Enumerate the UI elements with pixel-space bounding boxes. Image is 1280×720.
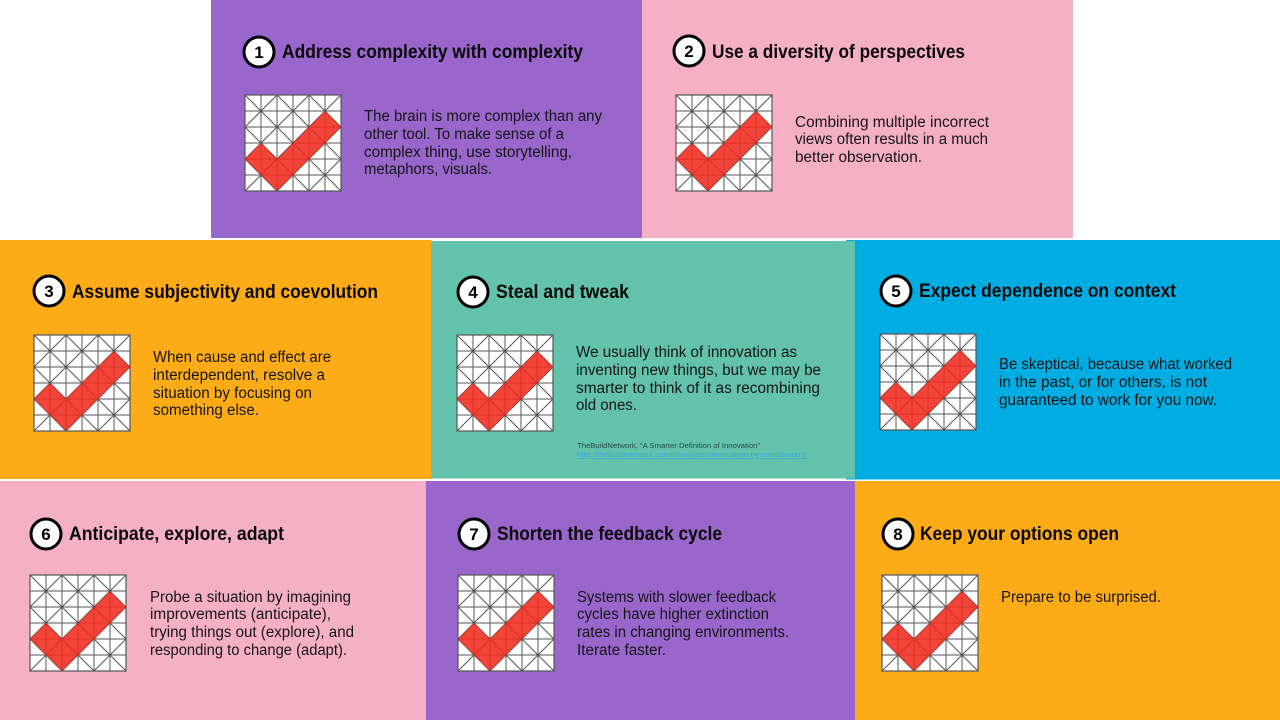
icon: checkmark grid 1 <box>245 95 341 191</box>
panel 4: steal and tweak <box>431 241 855 478</box>
body text 1: other tool. To make sense of a <box>364 126 564 143</box>
number badge 3: 3 <box>44 282 54 301</box>
body text 3 <box>153 349 331 419</box>
number badge 2 <box>674 36 704 66</box>
body text 4: inventing new things, but we may be <box>576 362 821 379</box>
number badge 1: 1 <box>254 43 264 62</box>
heading 3: Assume subjectivity and coevolution <box>72 282 378 303</box>
number badge 2: 2 <box>684 42 694 61</box>
heading 2: Use a diversity of perspectives <box>712 42 965 63</box>
body text 7: Systems with slower feedback <box>577 589 776 606</box>
number badge 4 <box>458 277 488 307</box>
body text 3: interdependent, resolve a <box>153 367 325 384</box>
body text 6: Probe a situation by imagining <box>150 589 351 606</box>
body text 4: We usually think of innovation as <box>576 344 797 361</box>
body text 8: Prepare to be surprised. <box>1001 589 1161 606</box>
number badge 8 <box>883 519 913 549</box>
body text 2: better observation. <box>795 149 922 166</box>
body text 5: guaranteed to work for you now. <box>999 392 1217 409</box>
number badge 1 <box>244 37 274 67</box>
number badge 7 <box>459 519 489 549</box>
body text 7: cycles have higher extinction <box>577 606 769 623</box>
icon: checkmark grid 3 <box>34 335 130 431</box>
icon: checkmark grid 6 <box>30 575 126 671</box>
body text 1: metaphors, visuals. <box>364 161 492 178</box>
panel 5: dependence on context <box>846 240 1280 480</box>
icon: checkmark grid 2 <box>676 95 772 191</box>
panel 2: diversity of perspectives <box>642 0 1073 238</box>
icon: checkmark grid 5 <box>880 334 976 430</box>
panel 8: keep your options open <box>855 481 1280 720</box>
body text 1 <box>364 108 602 178</box>
heading 8: Keep your options open <box>920 524 1119 545</box>
body text 5: Be skeptical, because what worked <box>999 356 1232 373</box>
body text 6: improvements (anticipate), <box>150 606 331 623</box>
heading 6: Anticipate, explore, adapt <box>69 524 285 545</box>
number badge 5 <box>881 276 911 306</box>
icon: checkmark grid 7 <box>458 575 554 671</box>
body text 1: The brain is more complex than any <box>364 108 602 125</box>
body text 4: smarter to think of it as recombining <box>576 380 820 397</box>
body text 4: old ones. <box>576 397 637 414</box>
body text 7: Iterate faster. <box>577 642 666 659</box>
number badge 7: 7 <box>469 525 479 544</box>
body text 1: complex thing, use storytelling, <box>364 144 572 161</box>
body text 3: When cause and effect are <box>153 349 331 366</box>
body text 2 <box>795 114 990 166</box>
number badge 4: 4 <box>468 283 478 302</box>
body text 7: rates in changing environments. <box>577 624 789 641</box>
heading 5: Expect dependence on context <box>919 281 1177 302</box>
body text 6: responding to change (adapt). <box>150 642 347 659</box>
source citation <box>577 441 808 459</box>
number badge 3 <box>34 276 64 306</box>
body text 7 <box>577 589 789 659</box>
number badge 8: 8 <box>893 525 903 544</box>
icon: checkmark grid 8 <box>882 575 978 671</box>
panel 7: shorten the feedback cycle <box>426 481 855 720</box>
source citation: TheBuildNetwork, “A Smarter Definition of Innovation” <box>577 441 761 450</box>
source citation: http://thebuildnetwork.com/innovation/innovation-by-combination/ <box>577 450 808 459</box>
heading 4: Steal and tweak <box>496 282 629 303</box>
body text 3: something else. <box>153 402 259 419</box>
panel 6: anticipate, explore, adapt <box>0 481 426 720</box>
heading 7: Shorten the feedback cycle <box>497 524 722 545</box>
body text 6 <box>150 589 354 659</box>
body text 5 <box>999 356 1232 409</box>
panel 1: address complexity <box>211 0 642 238</box>
body text 2: views often results in a much <box>795 131 988 148</box>
body text 4 <box>576 344 821 414</box>
heading 1: Address complexity with complexity <box>282 42 583 63</box>
body text 2: Combining multiple incorrect <box>795 114 990 131</box>
body text 5: in the past, or for others, is not <box>999 374 1208 391</box>
body text 3: situation by focusing on <box>153 385 312 402</box>
icon: checkmark grid 4 <box>457 335 553 431</box>
number badge 6: 6 <box>41 525 51 544</box>
number badge 5: 5 <box>891 282 901 301</box>
number badge 6 <box>31 519 61 549</box>
panel 3: subjectivity and coevolution <box>0 240 431 479</box>
body text 6: trying things out (explore), and <box>150 624 354 641</box>
